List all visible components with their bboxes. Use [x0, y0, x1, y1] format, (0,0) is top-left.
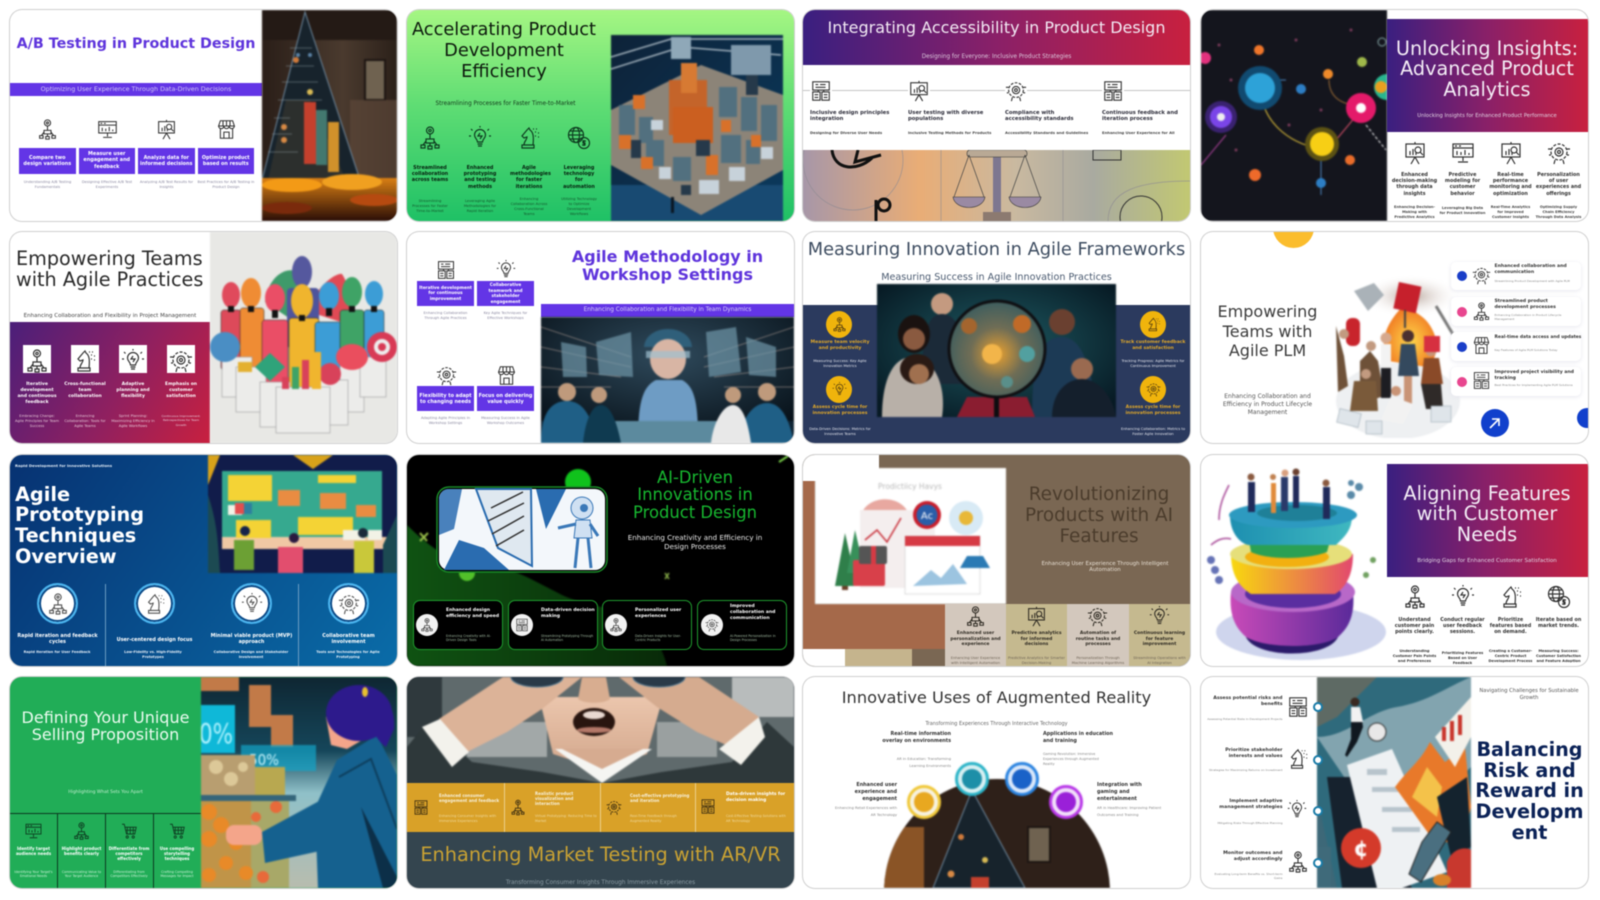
list item 1: Streamlining Product Development with Agile PLM — [1494, 279, 1570, 283]
kpi: team velocity: Measure team velocity and productivity — [811, 340, 869, 351]
item: enhanced decision-making: Enhancing Decision-Making with Predictive Analytics — [1394, 204, 1435, 219]
image: isometric factory — [610, 34, 784, 222]
tile: automation — [1067, 604, 1129, 666]
subtitle: Streamlining Processes for Faster Time-to-Market — [436, 100, 575, 106]
kpi: customer feedback — [1120, 310, 1186, 368]
item: agile methodologies — [510, 126, 552, 216]
item: product visualization — [505, 783, 601, 832]
item: adaptive planning: Sprint Planning: Maximizing Efficiency in Agile Workflows — [111, 414, 155, 428]
panel: Accelerating Product Development Efficiency — [407, 10, 794, 220]
item: agile methodologies: Enhancing Collaboration Across Cross-Functional Teams — [511, 196, 547, 216]
panel: Balancing Risk and Reward in Development — [1200, 677, 1588, 888]
panel: Aligning Features with Customer Needs — [1200, 455, 1588, 666]
title: Integrating Accessibility in Product Design — [828, 18, 1165, 36]
title: Development — [444, 40, 564, 61]
item: streamlined collaboration: Streamlining Processes for Faster Time-to-Market — [412, 198, 448, 213]
item: collaborative teamwork: Key Agile Techniques for Effective Workshops — [484, 311, 527, 320]
image: shopper in supermarket: 50% — [249, 751, 279, 769]
image: man with binoculars — [407, 677, 794, 783]
panel: AI-Driven Innovations in Product Design — [407, 455, 794, 666]
item: data-driven insights: Cost-Effective Testing Solutions with AR Technology — [726, 814, 786, 823]
item: cost-effective prototyping: Cost-effective prototyping and iteration — [630, 793, 689, 803]
subtitle: Transforming Experiences Through Interactive Technology — [926, 721, 1067, 727]
item: adaptive planning — [111, 344, 155, 428]
timeline line — [803, 90, 1190, 91]
feature: user engagement: Enhancing Retail Experiences with AR Technology — [835, 806, 897, 816]
item: enhanced decision-making: Enhanced decision-making through data insights — [1392, 172, 1437, 197]
card: personalized experiences — [602, 600, 692, 650]
subtitle: Enhancing Collaboration and Flexibility in Project Management — [24, 313, 196, 319]
item: customer pain points: Understand customer pain points clearly. — [1395, 617, 1434, 635]
decorative yellow half circle — [1272, 207, 1314, 248]
item: continuous feedback: Enhancing User Experience for All — [1102, 130, 1175, 134]
kpi: cycle time right: Assess cycle time for innovation processes — [1125, 405, 1181, 416]
item: adaptive management: Mitigating Risks Through Effective Planning — [1217, 821, 1282, 825]
subtitle band: Optimizing User Experience Through Data-Driven Decisions — [41, 84, 231, 92]
item: prioritize features: Creating a Customer-Centric Product Development Process — [1489, 649, 1532, 663]
item: cross-functional: Cross-functional team collaboration — [64, 382, 106, 399]
item: iterative development: Iterative development and continuous feedback — [17, 382, 57, 405]
item: prioritize stakeholders: Prioritize stakeholder interests and values — [1225, 748, 1282, 759]
item: leveraging technology: Leveraging technology for automation — [563, 164, 595, 190]
grid lines — [10, 813, 201, 888]
kpi: customer feedback: Tracking Progress: Agile Metrics for Continuous Improvement — [1121, 359, 1184, 368]
item: user feedback sessions — [1440, 585, 1486, 663]
subtitle: Designing for Everyone: Inclusive Product Strategies — [922, 54, 1071, 60]
title: Empowering Teams — [16, 247, 203, 270]
list item 4: Improved project visibility and tracking — [1494, 370, 1574, 381]
item: storytelling — [154, 814, 201, 888]
item: customer satisfaction: Continuous Improvement: Retrospectives for Team Growth — [161, 414, 201, 427]
tile: continuous learning: Continuous learning for feature improvement — [1134, 631, 1185, 647]
item: monitor outcomes: Evaluating Long-term Benefits vs. Short-term Gains — [1214, 872, 1282, 880]
title: Empowering Teams with Agile PLM — [1218, 302, 1317, 360]
title: Aligning Features — [1403, 482, 1571, 505]
tile: personalization: Enhancing User Experience with Intelligent Automation — [951, 656, 1000, 665]
item: rapid iteration: Rapid Iteration for User Feedback — [24, 650, 90, 654]
item: MVP approach: Collaborative Design and Stakeholder Involvement — [214, 650, 288, 659]
item: prioritize stakeholders: Strategies for Maximizing Returns on Investment — [1209, 768, 1282, 772]
title: AI-Driven Innovations in Product Design — [633, 468, 757, 522]
card: data-driven decisions — [508, 600, 598, 650]
card: design efficiency: Enhancing Creativity with AI-Driven Design Tools — [446, 634, 491, 642]
image: glass pyramid chart — [260, 9, 398, 222]
tile: automation: Automation of routine tasks and processes — [1076, 631, 1120, 647]
subtitle band: Enhancing Collaboration and Flexibility in Team Dynamics — [584, 307, 751, 313]
card: design efficiency — [413, 600, 503, 650]
feature: real-time overlay: Real-time information overlay on environments — [882, 731, 951, 744]
subtitle: Highlighting What Sets You Apart — [68, 790, 143, 795]
title — [1386, 484, 1588, 545]
panel: Agile Methodology in Workshop Settings — [407, 232, 794, 443]
item: continuous feedback — [1102, 80, 1178, 136]
kpi: team velocity: Measuring Success: Key Agile Innovation Metrics — [813, 359, 867, 368]
item: adaptive management: Implement adaptive management strategies — [1219, 799, 1282, 810]
panel: Integrating Accessibility in Product Design — [803, 10, 1190, 220]
item: iterative development: Enhancing Collaboration Through Agile Practices — [424, 311, 467, 320]
decorative blue circle edge — [1576, 408, 1596, 428]
panel: Innovative Uses of Augmented Reality — [803, 677, 1190, 888]
subtitle: Enhancing User Experience Through Intelligent Automation — [1041, 561, 1169, 573]
tile: continuous learning: Streamlining Operations with AI Integration — [1133, 656, 1186, 665]
item: product benefits: Highlight product benefits clearly — [62, 846, 101, 856]
title: with Customer — [1417, 502, 1557, 525]
yellow band — [407, 783, 794, 832]
tile: predictive analytics: Predictive Analytics for Smarter Decision-Making — [1008, 656, 1065, 665]
kpi: cycle time left: Data-Driven Decisions: Metrics for Innovative Teams — [809, 427, 871, 436]
kpi: customer feedback: Track customer feedback and satisfaction — [1121, 340, 1185, 351]
image: editorial risk illustration: ¢ — [1353, 837, 1368, 862]
item: consumer engagement: Enhanced consumer engagement and feedback — [439, 793, 499, 803]
eyebrow: Rapid Development for Innovative Solutions — [15, 463, 112, 468]
item: predictive modeling: Leveraging Big Data for Product Innovation — [1440, 206, 1485, 215]
item: target audience — [10, 814, 58, 888]
item: streamlined collaboration: Streamlined collaboration across teams — [412, 164, 448, 183]
image: team around a fire — [1334, 280, 1460, 438]
feature: gaming integration: Integration with gaming and entertainment — [1097, 782, 1142, 802]
item: inclusive design: Inclusive design principles integration — [810, 110, 889, 122]
item: cross-functional — [64, 344, 106, 428]
tile: predictive analytics — [1006, 604, 1067, 666]
item: measure user engagement: Designing Effective A/B Test Experiments — [82, 180, 132, 189]
item: adaptive planning: Adaptive planning and flexibility — [116, 382, 150, 399]
item: flexibility: Flexibility to adapt to changing needs — [419, 393, 472, 405]
panel: Empowering Teams with Agile PLM — [1200, 232, 1588, 443]
color blocks — [803, 455, 1190, 666]
item: leveraging technology: Utilizing Technology to Optimize Development Workflows — [561, 196, 597, 216]
item: cost-effective prototyping: Real-Time Feedback through Augmented Reality — [630, 814, 677, 823]
item: collaborative teamwork: Collaborative teamwork and stakeholder engagement — [489, 282, 522, 304]
item: measure user engagement — [78, 120, 136, 189]
item: customer pain points — [1392, 585, 1438, 663]
title: A/B Testing in Product Design — [17, 36, 255, 52]
item: enhanced prototyping: Leveraging Agile Methodologies for Rapid Iteration — [464, 198, 496, 213]
item: prioritize features — [1488, 585, 1534, 663]
item: differentiate: Differentiating from Competitors Effectively — [110, 870, 148, 878]
item: inclusive design — [810, 80, 890, 136]
title: with Agile Practices — [16, 268, 203, 291]
image: robot presenting document — [436, 486, 608, 573]
item: storytelling: Use compelling storytelling techniques — [160, 846, 194, 861]
item: compare two design variations — [18, 118, 77, 189]
title: Revolutionizing Products with AI Features — [1025, 484, 1173, 547]
item: iterate on market trends — [1536, 585, 1582, 663]
list item 3 — [1450, 332, 1580, 361]
item: user feedback sessions: Prioritizing Features Based on User Feedback — [1442, 651, 1483, 665]
header band — [1386, 464, 1588, 577]
title: Innovative Uses of Augmented Reality — [842, 688, 1151, 707]
card: improved collaboration: AI-Powered Personalization in Design Processes — [730, 634, 776, 642]
item: product benefits — [58, 814, 106, 888]
kpi: cycle time right — [1120, 375, 1186, 436]
title: Unlocking Insights: Advanced Product Analytics — [1396, 36, 1578, 101]
panel: Empowering Teams with Agile Practices — [10, 232, 397, 443]
item: real-time monitoring: Real-Time Analytics for Improved Customer Insights — [1491, 204, 1530, 219]
item: rapid iteration: Rapid iteration and feedback cycles — [17, 633, 98, 645]
panel: Defining Your Unique Selling Proposition — [10, 677, 397, 888]
image: analytics dashboard illustration: Ac — [921, 511, 933, 522]
list item 2 — [1450, 297, 1580, 326]
feature: education and training: Gaming Revolution: Immersive Experiences through Augmented Reality — [1043, 752, 1099, 766]
image: colorful team figures — [208, 232, 398, 443]
subtitle: Transforming Consumer Insights Through Immersive Experiences — [506, 880, 695, 886]
kpi: team velocity — [810, 310, 870, 368]
item: delivering value: Measuring Success in Agile Workshop Outcomes — [481, 416, 530, 425]
feature: education and training: Applications in education and training — [1043, 731, 1113, 744]
item: compliance — [1004, 82, 1089, 135]
image: layered funnel with team — [1200, 455, 1386, 666]
item: measure user engagement: Measure user engagement and feedback — [83, 151, 130, 170]
list item 4: Best Practices for Implementing Agile PLM Solutions — [1494, 383, 1573, 387]
feature: real-time overlay: AR in Education: Transforming Learning Environments — [897, 757, 951, 768]
item: customer satisfaction: Emphasis on customer satisfaction — [165, 382, 197, 399]
item: adaptive management — [1200, 796, 1322, 841]
item: iterative development — [14, 344, 60, 428]
item: analyze data — [137, 119, 196, 189]
tile: automation: Personalization Through Machine Learning Algorithms — [1072, 656, 1124, 665]
item: product benefits: Communicating Value to Your Target Audience — [62, 870, 101, 878]
card: personalized experiences: Data-Driven Insights for User-Centric Products — [635, 634, 681, 642]
title: ent — [1512, 821, 1547, 844]
panel: Agile Prototyping Techniques Overview — [10, 455, 397, 666]
item: product visualization: Realistic product visualization and interaction — [535, 791, 573, 806]
card: design efficiency: Enhanced design efficiency and speed — [446, 608, 499, 619]
item: assess risks — [1200, 693, 1322, 738]
kpi: cycle time right: Enhancing Collaboration: Metrics to Foster Agile Innovation — [1121, 427, 1185, 436]
title: Accelerating Product — [412, 18, 596, 40]
image: justice scales — [802, 149, 1191, 222]
subtitle: Unlocking Insights for Enhanced Product Performance — [1417, 112, 1557, 118]
item: personalization: Personalization of user experiences and offerings — [1536, 172, 1581, 197]
item: real-time monitoring: Real-time performance monitoring and optimization — [1489, 172, 1532, 197]
image: team at kanban board — [208, 455, 397, 573]
list item 1: Enhanced collaboration and communication — [1494, 264, 1567, 275]
item: MVP approach: Minimal viable product (MVP) approach — [211, 633, 292, 645]
item: leveraging technology — [561, 126, 597, 216]
item: storytelling: Crafting Compelling Messages for Impact — [160, 870, 194, 878]
item: optimize product: Optimize product based on results — [202, 154, 250, 167]
tile: personalization: Enhanced user personalization and experience — [950, 631, 1001, 647]
title: Prototyping — [15, 503, 144, 526]
item: user-centered design — [107, 583, 202, 663]
item: optimize product — [197, 119, 255, 189]
background glow shapes — [407, 455, 794, 666]
gradient panel with items — [10, 322, 210, 443]
subtitle: Navigating Challenges for Sustainable Growth — [1479, 688, 1579, 701]
item: iterative development: Embracing Change: Agile Principles for Team Success — [15, 414, 59, 428]
tile: predictive analytics: Predictive analytics for informed decisions — [1011, 631, 1062, 647]
item: personalization — [1535, 142, 1582, 220]
card: personalized experiences: Personalized user experiences — [635, 608, 681, 619]
panel: Revolutionizing Products with AI Features — [803, 455, 1190, 666]
item: prioritize stakeholders — [1200, 745, 1322, 790]
panel: A/B Testing in Product Design — [10, 10, 397, 220]
item: assess risks: Assess potential risks and benefits — [1213, 696, 1282, 707]
item: collaborative involvement: Collaborative team involvement — [322, 633, 375, 645]
item: cost-effective prototyping — [601, 783, 696, 832]
image: team with magnifying glass — [876, 282, 1118, 418]
item: continuous feedback: Continuous feedback and iteration process — [1102, 110, 1178, 122]
title — [15, 485, 205, 568]
item: enhanced prototyping: Enhanced prototyping and testing methods — [464, 164, 496, 190]
item: iterate on market trends: Iterate based on market trends. — [1536, 617, 1581, 629]
item: cross-functional: Enhancing Collaboration: Tools for Agile Teams — [64, 414, 106, 428]
feature: gaming integration — [1097, 782, 1172, 822]
item: real-time monitoring — [1489, 141, 1532, 220]
item: user feedback sessions: Conduct regular user feedback sessions. — [1440, 617, 1485, 635]
title — [1472, 740, 1588, 844]
title — [16, 247, 204, 291]
image: editorial risk illustration — [1316, 677, 1470, 888]
image: analytics dashboard illustration: Prodictiicy Havys — [878, 482, 942, 491]
panel: Measuring Innovation in Agile Frameworks — [803, 232, 1190, 443]
item: user testing: User testing with diverse populations — [908, 110, 983, 122]
item: compliance: Compliance with accessibility standards — [1005, 110, 1074, 122]
item: enhanced prototyping — [463, 126, 497, 213]
item: customer satisfaction — [161, 344, 201, 427]
title — [412, 18, 596, 82]
dividers — [105, 584, 299, 666]
item: data-driven insights: Data-driven insights for decision making — [726, 792, 785, 803]
item: enhanced decision-making — [1391, 141, 1438, 219]
subtitle: Enhancing Collaboration and Efficiency in Product Lifecycle Management — [1223, 393, 1312, 416]
item: iterative development — [416, 260, 475, 320]
item: rapid iteration — [10, 583, 105, 663]
card: improved collaboration: Improved collaboration and communication — [730, 604, 775, 621]
item: agile methodologies: Agile methodologies for faster iterations — [510, 164, 551, 190]
header band — [1386, 18, 1588, 132]
kpi: cycle time left: Assess cycle time for innovation processes — [812, 405, 868, 416]
title: Measuring Innovation in Agile Frameworks — [808, 239, 1185, 260]
title: Efficiency — [461, 61, 547, 82]
item: inclusive design: Designing for Diverse User Needs — [810, 130, 882, 134]
title: Developm — [1476, 800, 1583, 823]
title: Overview — [15, 545, 117, 568]
item: compare two design variations: Compare two design variations — [23, 154, 71, 167]
subtitle: Bridging Gaps for Enhanced Customer Satisfaction — [1417, 558, 1557, 564]
item: product visualization: Virtual Prototyping: Reducing Time to Market — [535, 814, 597, 823]
subtitle: Enhancing Creativity and Efficiency in Design Processes — [628, 533, 762, 551]
kpi: cycle time left — [808, 375, 871, 436]
list item 2: Streamlined product development processes — [1494, 299, 1556, 310]
item: customer pain points: Understanding Customer Pain Points and Preferences — [1393, 649, 1436, 663]
item: compare two design variations: Understanding A/B Testing Fundamentals — [24, 180, 71, 189]
image: network nodes on dark — [1200, 9, 1388, 222]
title: Enhancing Market Testing with AR/VR — [420, 843, 781, 866]
tile: personalization — [945, 604, 1006, 666]
item: flexibility: Adapting Agile Principles in Workshop Settings — [421, 416, 470, 425]
title: Agile — [15, 483, 70, 506]
card: data-driven decisions: Streamlining Prototyping Through AI Automation — [541, 634, 593, 642]
item: analyze data: Analyze data for informed decisions — [140, 154, 192, 167]
list item 1 — [1450, 262, 1580, 290]
title: Defining Your Unique Selling Proposition — [22, 708, 189, 744]
item: assess risks: Assessing Potential Risks in Development Projects — [1207, 717, 1282, 721]
item: collaborative involvement: Tools and Technologies for Agile Prototyping — [316, 650, 380, 659]
item: collaborative teamwork — [476, 259, 535, 320]
icon: arrow button — [1480, 408, 1510, 438]
item: predictive modeling — [1439, 142, 1486, 215]
feature: gaming integration: AR in Healthcare: Improving Patient Outcomes and Training — [1097, 806, 1161, 816]
list item 4 — [1450, 367, 1580, 396]
title: Needs — [1457, 523, 1517, 546]
item: collaborative involvement — [301, 583, 396, 663]
image: shopper in supermarket — [201, 677, 397, 888]
feature: education and training — [1043, 731, 1115, 777]
item: data-driven insights — [696, 783, 794, 832]
feature: user engagement: Enhanced user experience and engagement — [855, 782, 897, 802]
item: analyze data: Analyzing A/B Test Results for Insights — [140, 180, 193, 189]
card: improved collaboration — [697, 600, 787, 650]
subtitle band — [541, 304, 794, 317]
item: user-centered design: Low-Fidelity vs. High-Fidelity Prototypes — [124, 650, 182, 659]
item: consumer engagement — [407, 783, 505, 832]
feature: real-time overlay — [881, 731, 951, 777]
item: optimize product: Best Practices for A/B Testing in Product Design — [198, 180, 254, 189]
panel: Unlocking Insights: Advanced Product Analytics — [1200, 10, 1588, 220]
item: user-centered design: User-centered design focus — [117, 637, 192, 643]
item: monitor outcomes: Monitor outcomes and adjust accordingly — [1223, 851, 1282, 862]
navy lower panel — [803, 305, 1190, 443]
card: data-driven decisions: Data-driven decision making — [541, 608, 595, 619]
item: predictive modeling: Predictive modeling for customer behavior — [1445, 172, 1480, 197]
image: futuristic meeting room — [540, 316, 795, 444]
title: Agile Methodology in Workshop Settings — [572, 247, 763, 284]
item: differentiate: Differentiate from competitors effectively — [109, 846, 149, 861]
item: user testing — [908, 80, 992, 136]
feature: user engagement — [833, 782, 897, 822]
item: target audience: Identify target audience needs — [16, 846, 51, 856]
title: Balancing — [1476, 738, 1583, 761]
item: personalization: Optimizing Supply Chain Efficiency Through Data Analysis — [1536, 204, 1581, 219]
subtitle band — [10, 82, 262, 96]
list item 2: Enhancing Collaboration in Product Lifecycle Management — [1494, 313, 1561, 321]
title: Reward in — [1475, 779, 1584, 802]
item: prioritize features: Prioritize features based on demand. — [1490, 617, 1531, 635]
list item 3: Key Features of Agile PLM Solutions Today — [1494, 348, 1557, 352]
tile: continuous learning — [1129, 604, 1190, 666]
item: differentiate — [106, 814, 154, 888]
item: compliance: Accessibility Standards and Guidelines — [1005, 130, 1088, 134]
image: analytics dashboard illustration — [815, 468, 1006, 604]
title: Risk and — [1483, 759, 1576, 782]
item: user testing: Inclusive Testing Methods for Products — [908, 130, 991, 134]
item: flexibility — [416, 366, 475, 425]
image: half circle with pyramid — [882, 760, 1112, 889]
item: MVP approach — [204, 583, 299, 663]
title: Techniques — [15, 524, 136, 547]
item: delivering value — [476, 365, 535, 425]
item: streamlined collaboration — [411, 126, 448, 213]
item: monitor outcomes — [1200, 848, 1322, 888]
panel: Enhancing Market Testing with AR/VR — [407, 677, 794, 888]
item: delivering value: Focus on delivering value quickly — [479, 393, 532, 405]
header band — [803, 10, 1190, 65]
item: target audience: Identifying Your Target's Emotional Needs — [14, 870, 53, 878]
list item 3: Real-time data access and updates — [1494, 335, 1581, 340]
subtitle: Measuring Success in Agile Innovation Practices — [881, 272, 1112, 283]
item: iterative development: Iterative development for continuous improvement — [419, 285, 472, 301]
list: benefit cards — [1451, 262, 1582, 398]
item: consumer engagement: Enhancing Consumer Insights with Immersive Experiences — [439, 814, 496, 823]
item: iterate on market trends: Measuring Success: Customer Satisfaction and Feature Adoption — [1536, 649, 1581, 663]
